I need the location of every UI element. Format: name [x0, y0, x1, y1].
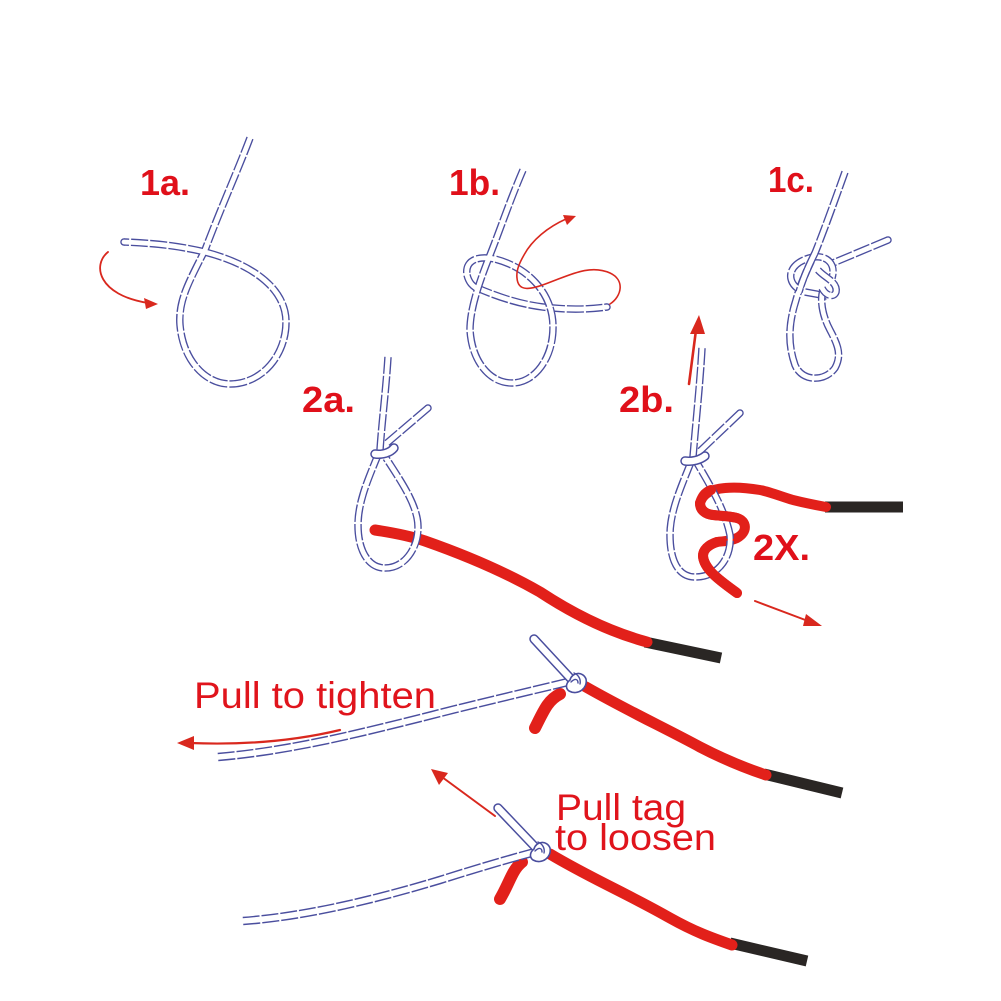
rope: tag end [698, 409, 744, 453]
text: pull tag to loosen: to loosen [555, 817, 716, 858]
arrow: curved red [100, 252, 158, 309]
step 1a [100, 138, 286, 384]
pull to tighten diagram [177, 639, 842, 793]
step 2b [619, 315, 903, 626]
leader: red tag [500, 862, 522, 899]
text: pull tag to loosen: Pull tag [556, 787, 686, 828]
leader: red section [586, 687, 766, 775]
step 1c [768, 159, 892, 378]
arrow: up [689, 315, 705, 384]
red crossing over loop, upper [700, 490, 737, 518]
knot [530, 842, 550, 862]
label 1b: 1b. [449, 162, 500, 203]
leader: red tag [535, 694, 560, 728]
arrow: pull left [177, 730, 340, 750]
main line [243, 852, 535, 921]
leader: red section under rope [700, 488, 826, 593]
text: pull tag to loosen [555, 787, 716, 858]
arrow: right [755, 601, 822, 626]
step 2a [302, 357, 721, 658]
label 1c: 1c. [768, 159, 814, 200]
leader: black section [730, 943, 807, 961]
label 2X: 2X. [753, 527, 810, 568]
pull tag to loosen diagram [243, 769, 807, 961]
tag end [534, 639, 572, 680]
leader: black section [645, 642, 721, 658]
main line [218, 682, 568, 757]
knot [685, 456, 705, 461]
text: pull to tighten: Pull to tighten [194, 675, 436, 716]
knot [375, 448, 394, 454]
label 1a: 1a. [140, 162, 190, 203]
label 2a: 2a. [302, 379, 355, 420]
rope: tag end [387, 404, 432, 443]
leader: red section [375, 530, 647, 642]
rope: open loop [120, 138, 286, 384]
knot [566, 673, 586, 693]
tag end [498, 808, 538, 850]
rope: tightening knot [790, 172, 892, 378]
arrow: pull tag [431, 769, 495, 816]
arrow: red path through loop [517, 215, 620, 304]
rope: loop [358, 357, 418, 568]
label 2b: 2b. [619, 379, 674, 420]
rope: loop with tag [467, 170, 611, 383]
leader: black section [764, 774, 842, 793]
step 1b [449, 162, 620, 383]
leader: red section [550, 854, 732, 945]
leader: black section [825, 502, 903, 512]
red crossing over loop, lower [703, 542, 737, 593]
rope: loop [670, 348, 730, 577]
